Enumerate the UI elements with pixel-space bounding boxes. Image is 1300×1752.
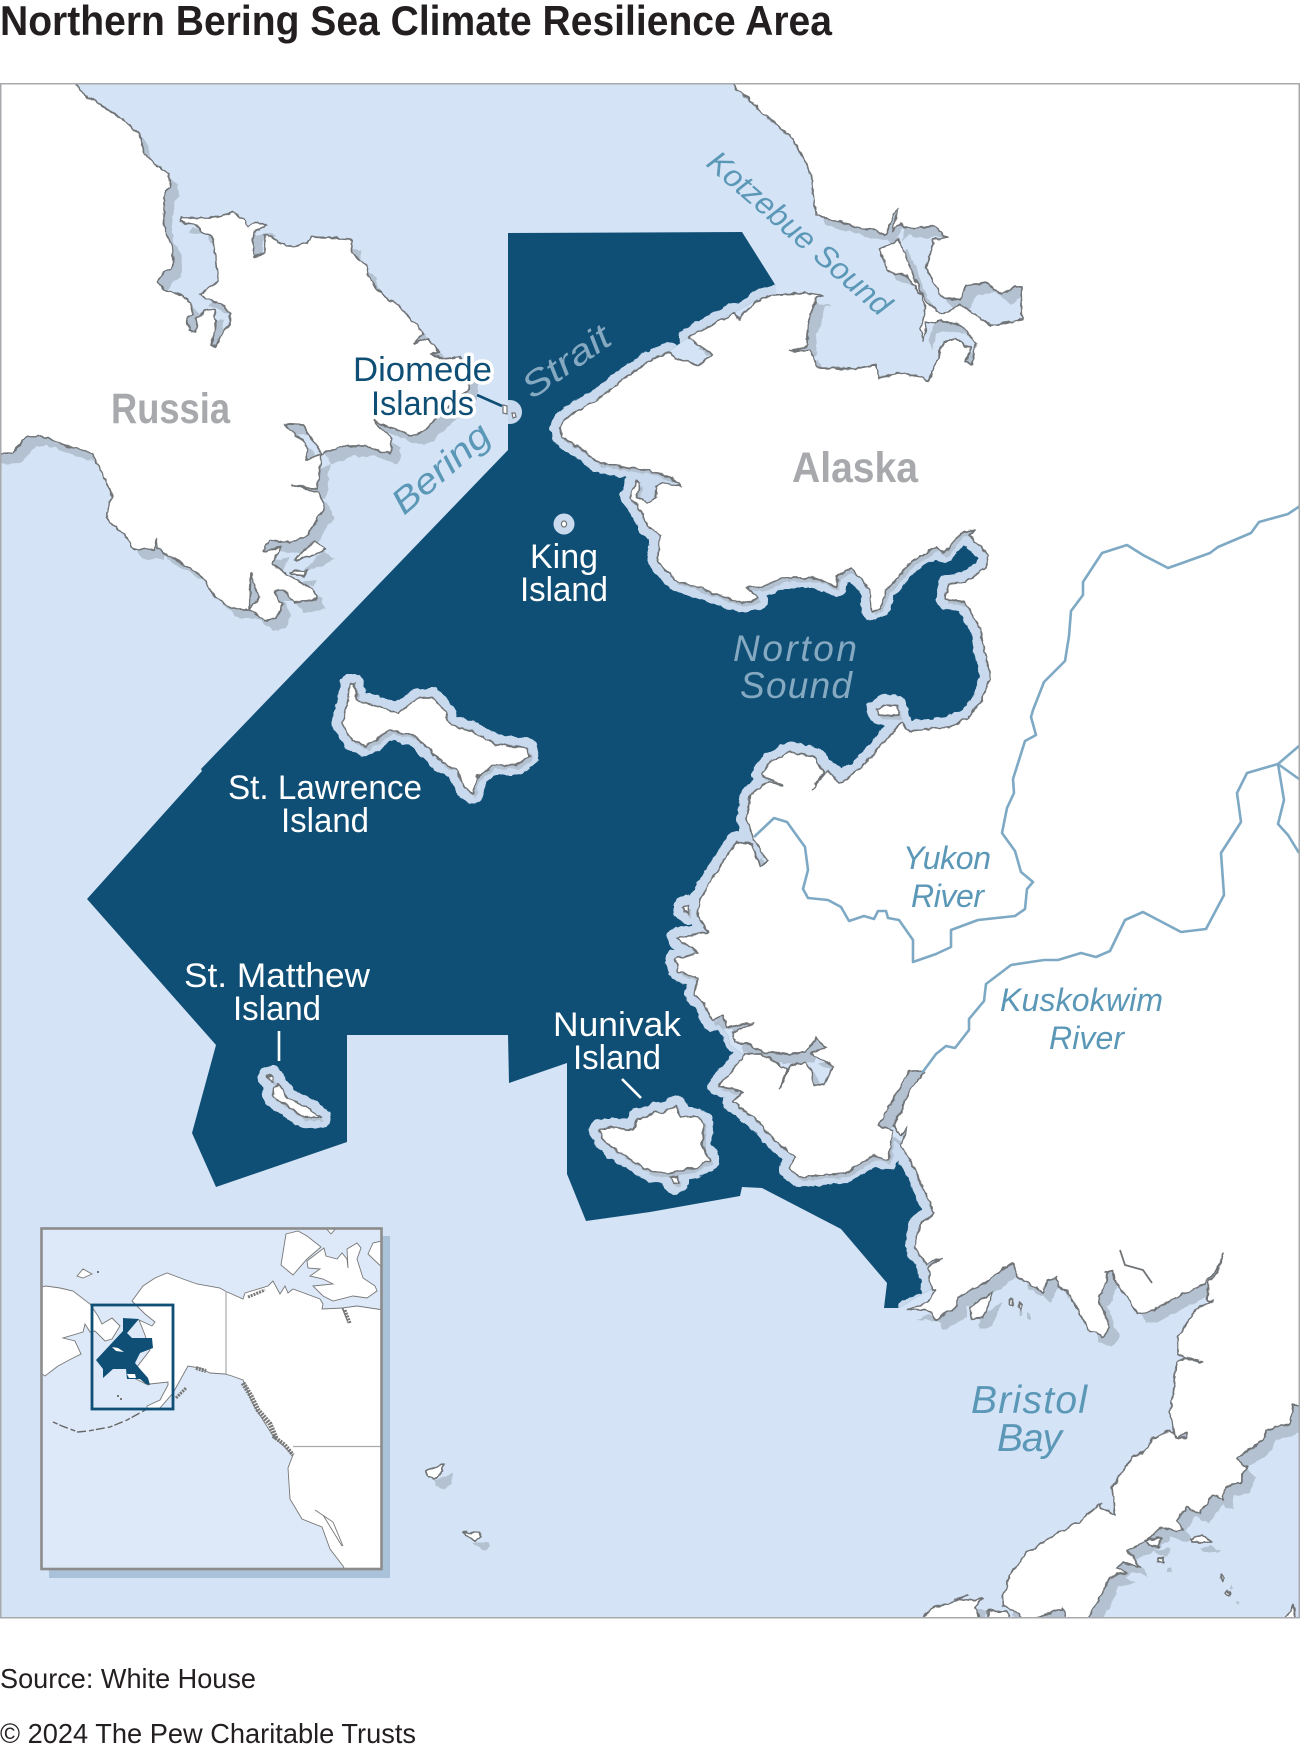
label: Yukon River (903, 840, 991, 914)
label: St. Lawrence Island (228, 769, 422, 840)
inset: highlighted area (96, 1318, 153, 1385)
inset: coastal archipelagos (176, 1290, 350, 1546)
inset: Wrangel Island (77, 1269, 92, 1278)
label: Bristol Bay: Bristol (971, 1379, 1088, 1422)
source note: Source: White House (0, 1663, 256, 1694)
inset frame (42, 1228, 382, 1569)
label: Yukon River: River (911, 878, 985, 914)
label: Diomede Islands (353, 351, 492, 423)
label: Nunivak Island (553, 1006, 682, 1077)
inset: islands in highlighted area (112, 1347, 136, 1378)
label: St. Lawrence Island: St. Lawrence (228, 769, 422, 807)
label: Norton Sound: Norton (733, 628, 857, 669)
leader: Nunivak Island (622, 1079, 641, 1098)
river: Yukon (754, 506, 1300, 962)
label: Bristol Bay: Bay (997, 1417, 1064, 1460)
inset: small dots (97, 1271, 122, 1400)
inset: Arctic islands (280, 1230, 380, 1302)
label: King Island: King (530, 538, 598, 576)
label: Russia: Russia (111, 385, 231, 433)
label: Nunivak Island: Nunivak (553, 1006, 682, 1044)
label: Nunivak Island: Island (573, 1039, 661, 1077)
island: King Island (561, 521, 567, 527)
inlet north of Bristol Bay (1120, 1250, 1152, 1283)
inset: extent rectangle (92, 1305, 173, 1409)
label: King Island (520, 538, 608, 609)
label: Kuskokwim River: River (1049, 1020, 1125, 1056)
label: St. Matthew Island: Island (233, 990, 321, 1028)
inset: internal borders (226, 1291, 382, 1446)
label: Alaska: Alaska (792, 444, 919, 492)
copyright: © 2024 The Pew Charitable Trusts (0, 1718, 416, 1749)
label: St. Matthew Island (184, 957, 370, 1028)
label: Bristol Bay (971, 1379, 1088, 1460)
label: Yukon River: Yukon (903, 840, 991, 876)
label: King Island: Island (520, 571, 608, 609)
label: Bering: Bering (384, 415, 499, 522)
river: Kuskokwim (922, 746, 1299, 1073)
label: St. Matthew Island: St. Matthew (184, 957, 370, 995)
label: Kuskokwim River: Kuskokwim (1000, 982, 1163, 1018)
label: Strait: Strait (514, 316, 620, 407)
inset: Aleutian chain (53, 1409, 147, 1432)
label: Norton Sound: Sound (740, 665, 853, 706)
area: Northern Bering Sea Climate Resilience Area (87, 232, 1000, 1308)
leader: St. Matthew Island (278, 1031, 280, 1061)
panel: locator inset (36, 1226, 390, 1580)
islands: Diomede (503, 405, 516, 418)
inset: Asia (36, 1286, 120, 1376)
label: Kotzebue Sound: Kotzebue Sound (700, 144, 900, 324)
label: St. Lawrence Island: Island (281, 802, 369, 840)
coastal buffer halo (258, 284, 990, 1308)
label: Diomede Islands: Islands (371, 385, 474, 423)
leader: Diomede Islands (477, 395, 502, 406)
inset: North America (130, 1273, 390, 1580)
label: Norton Sound (733, 628, 857, 706)
label: Kuskokwim River (1000, 982, 1163, 1056)
label: Diomede Islands: Diomede (353, 351, 492, 389)
